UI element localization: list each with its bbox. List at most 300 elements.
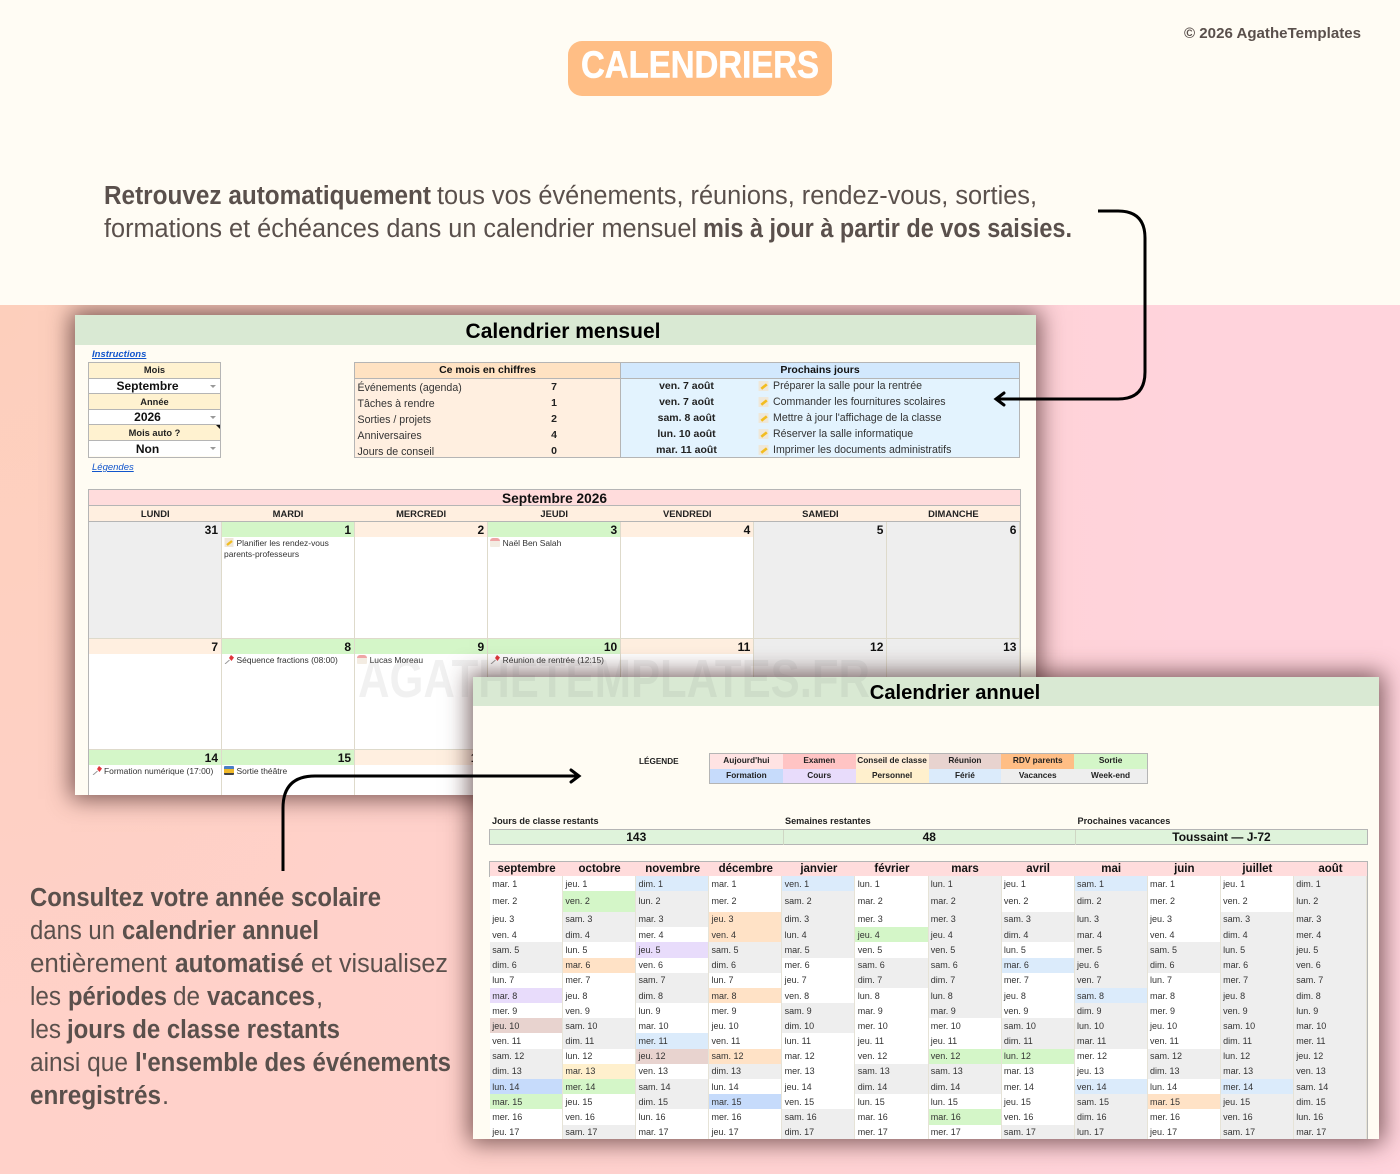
year grid: mer. 2 <box>492 896 517 906</box>
stat values <box>489 829 1368 845</box>
weekday header: DIMANCHE <box>928 508 979 519</box>
year grid: sam. 10 <box>565 1021 597 1031</box>
year grid: sam. 15 <box>1077 1097 1109 1107</box>
year grid: mer. 9 <box>712 1006 737 1016</box>
year grid: mer. 7 <box>1004 975 1029 985</box>
year grid: jeu. 5 <box>1296 945 1318 955</box>
year grid: sam. 3 <box>1004 914 1031 924</box>
year grid: ven. 9 <box>565 1006 590 1016</box>
legend grid: Sortie <box>1099 755 1122 765</box>
stat values: 143 <box>626 830 646 844</box>
text block: annual description: et visualisez <box>311 950 448 978</box>
day cells: 9 <box>477 640 484 654</box>
year grid: lun. 16 <box>1296 1112 1323 1122</box>
month header row: septembre <box>497 863 556 875</box>
year grid: jeu. 8 <box>1004 991 1026 1001</box>
year grid: ven. 6 <box>1296 960 1321 970</box>
stat label: weeks: Semaines restantes <box>785 816 871 826</box>
year grid: ven. 1 <box>785 879 809 889</box>
year grid: lun. 5 <box>565 945 587 955</box>
year grid: mer. 10 <box>858 1021 888 1031</box>
year grid: mar. 9 <box>931 1006 956 1016</box>
year grid: mer. 16 <box>712 1112 742 1122</box>
month header row: février <box>874 863 910 875</box>
weekday header: MERCREDI <box>396 508 446 519</box>
year grid: dim. 10 <box>785 1021 814 1031</box>
year grid: dim. 11 <box>1223 1036 1252 1046</box>
weekday header: MARDI <box>273 508 303 519</box>
year grid: lun. 7 <box>1150 975 1172 985</box>
year grid: ven. 5 <box>858 945 882 955</box>
day cells: Naël Ben Salah <box>503 538 561 548</box>
year grid: mer. 3 <box>858 914 883 924</box>
panel: upcoming days <box>620 362 1020 458</box>
year grid: lun. 12 <box>565 1051 592 1061</box>
year grid: mer. 2 <box>712 896 737 906</box>
year grid: sam. 3 <box>565 914 592 924</box>
year grid: jeu. 8 <box>565 991 587 1001</box>
legend grid: Examen <box>803 755 835 765</box>
year grid: mar. 4 <box>1077 930 1102 940</box>
year grid: mer. 9 <box>1150 1006 1175 1016</box>
year grid: lun. 17 <box>1077 1127 1104 1137</box>
legend grid: Vacances <box>1019 770 1057 780</box>
panel: month figures: 4 <box>551 428 557 440</box>
year grid: sam. 5 <box>1150 945 1177 955</box>
year grid: jeu. 17 <box>712 1127 739 1137</box>
year grid: jeu. 3 <box>492 914 514 924</box>
year grid: sam. 6 <box>858 960 885 970</box>
text block: intro: mis à jour à partir de vos saisies. <box>703 215 1072 243</box>
year grid: dim. 1 <box>1296 879 1321 889</box>
year grid: dim. 6 <box>712 960 736 970</box>
panel: upcoming days: Mettre à jour l'affichage de la classe <box>773 412 941 424</box>
legend grid: Cours <box>807 770 831 780</box>
day cells: 31 <box>205 523 218 537</box>
year grid: mar. 15 <box>1150 1097 1180 1107</box>
annual heading <box>473 677 1379 706</box>
year grid: mar. 17 <box>638 1127 668 1137</box>
text block: annual description: jours de classe restants <box>66 1016 340 1044</box>
year grid: sam. 7 <box>1296 975 1323 985</box>
year grid: dim. 7 <box>931 975 955 985</box>
year grid: ven. 16 <box>1223 1112 1253 1122</box>
panel: month selector: Septembre <box>116 379 179 393</box>
text block: annual description: Consultez votre année scolaire <box>30 884 381 912</box>
day cells: 3 <box>611 523 617 537</box>
year grid: lun. 14 <box>1150 1082 1177 1092</box>
year grid: jeu. 14 <box>785 1082 812 1092</box>
month header row: août <box>1318 863 1343 875</box>
day cells: Séquence fractions (08:00) <box>236 654 338 664</box>
month header row: janvier <box>800 863 837 875</box>
year grid: sam. 5 <box>492 945 519 955</box>
weekday header <box>89 506 1020 522</box>
monthly heading: Calendrier mensuel <box>466 320 660 343</box>
year grid: jeu. 13 <box>1077 1066 1104 1076</box>
panel: month selector: 2026 <box>134 410 161 424</box>
year grid: mar. 5 <box>785 945 810 955</box>
day cells: 4 <box>744 523 750 537</box>
year grid: ven. 14 <box>1077 1082 1106 1092</box>
year grid: dim. 6 <box>1150 960 1175 970</box>
legend grid: Conseil de classe <box>857 755 927 765</box>
year grid: ven. 4 <box>1150 930 1175 940</box>
text block: intro: formations et échéances dans un calendrier mensuel <box>104 215 697 243</box>
year grid: lun. 8 <box>931 991 953 1001</box>
year grid: mar. 17 <box>1296 1127 1326 1137</box>
day cells: Lucas Moreau <box>370 654 423 664</box>
text block: annual description: automatisé <box>175 950 304 978</box>
year grid: lun. 9 <box>1296 1006 1318 1016</box>
year grid: sam. 3 <box>1223 914 1250 924</box>
year grid: ven. 4 <box>492 930 517 940</box>
day cells: 13 <box>1003 640 1016 654</box>
year grid: mar. 1 <box>712 879 737 889</box>
year grid: ven. 12 <box>858 1051 887 1061</box>
panel: month figures: 0 <box>551 444 557 456</box>
year grid <box>490 876 1368 1140</box>
panel: month figures: Ce mois en chiffres <box>439 364 536 376</box>
year grid: ven. 11 <box>492 1036 521 1046</box>
legend grid: Réunion <box>948 755 982 765</box>
day cells: Réunion de rentrée (12:15) <box>503 654 604 664</box>
year grid: mar. 8 <box>712 991 737 1001</box>
year grid: mer. 7 <box>565 975 590 985</box>
year grid: ven. 16 <box>565 1112 595 1122</box>
year grid: mar. 15 <box>492 1097 522 1107</box>
year grid: mar. 13 <box>1004 1066 1034 1076</box>
legend grid: Aujourd'hui <box>723 755 770 765</box>
day cells: Formation numérique (17:00) <box>104 766 213 776</box>
year grid: ven. 2 <box>565 896 590 906</box>
year grid: sam. 2 <box>785 896 812 906</box>
year grid: ven. 7 <box>1077 975 1101 985</box>
year grid: mar. 16 <box>858 1112 888 1122</box>
year grid: jeu. 12 <box>638 1051 665 1061</box>
year grid: mer. 17 <box>858 1127 888 1137</box>
year grid: mar. 10 <box>638 1021 668 1031</box>
copyright: © 2026 AgatheTemplates <box>1184 25 1361 42</box>
link: legends: Légendes <box>92 462 134 473</box>
year grid: lun. 4 <box>785 930 807 940</box>
year grid: ven. 6 <box>638 960 663 970</box>
year grid: lun. 5 <box>1004 945 1026 955</box>
text block: annual description: les <box>30 1016 61 1044</box>
year grid: ven. 16 <box>1004 1112 1033 1122</box>
year grid: dim. 11 <box>565 1036 594 1046</box>
panel: month figures: Événements (agenda) <box>358 382 462 394</box>
link: instructions: Instructions <box>92 349 146 360</box>
year grid: mar. 15 <box>712 1097 742 1107</box>
year grid: mar. 1 <box>1150 879 1175 889</box>
month header row: juillet <box>1242 863 1272 875</box>
panel: month figures: Tâches à rendre <box>358 398 435 410</box>
stat values: 48 <box>923 830 936 844</box>
year grid: sam. 9 <box>785 1006 812 1016</box>
year grid: dim. 9 <box>1077 1006 1101 1016</box>
year grid: jeu. 1 <box>565 879 587 889</box>
year grid: ven. 2 <box>1223 896 1248 906</box>
year grid: mar. 9 <box>858 1006 883 1016</box>
year grid: sam. 12 <box>712 1051 744 1061</box>
year grid: mer. 12 <box>1077 1051 1107 1061</box>
legend label: LÉGENDE <box>639 757 679 766</box>
year grid: jeu. 15 <box>565 1097 592 1107</box>
year grid: sam. 17 <box>1223 1127 1255 1137</box>
year grid: dim. 15 <box>1296 1097 1326 1107</box>
year grid: dim. 15 <box>638 1097 668 1107</box>
year grid: sam. 13 <box>931 1066 963 1076</box>
panel: upcoming days: ven. 7 août <box>659 380 714 392</box>
year grid: ven. 4 <box>712 930 736 940</box>
legend grid: Personnel <box>872 770 912 780</box>
month header row: octobre <box>579 863 621 875</box>
day cells <box>89 522 1020 795</box>
year grid: ven. 13 <box>1296 1066 1326 1076</box>
year grid: mer. 2 <box>1150 896 1175 906</box>
year grid: mar. 2 <box>858 896 883 906</box>
panel: month grid <box>88 489 1021 795</box>
stat values: Toussaint — J-72 <box>1172 830 1271 844</box>
title badge: CALENDRIERS <box>581 44 819 86</box>
legend grid: Férié <box>955 770 975 780</box>
legend grid: Formation <box>726 770 767 780</box>
year grid: lun. 11 <box>785 1036 811 1046</box>
stat label: holidays: Prochaines vacances <box>1078 816 1170 826</box>
text block: annual description: ainsi que <box>30 1049 128 1077</box>
year grid: sam. 8 <box>1077 991 1104 1001</box>
year grid: jeu. 5 <box>638 945 660 955</box>
month header row: novembre <box>645 863 700 875</box>
year grid: jeu. 11 <box>931 1036 957 1046</box>
year grid: mar. 3 <box>638 914 663 924</box>
day cells: 5 <box>877 523 883 537</box>
annual heading: Calendrier annuel <box>870 682 1040 704</box>
panel: month selector: Non <box>136 442 159 456</box>
year grid: mer. 4 <box>638 930 663 940</box>
text block: annual description: l'ensemble des événements <box>135 1049 451 1077</box>
year grid: mer. 16 <box>1150 1112 1180 1122</box>
year grid: lun. 2 <box>1296 896 1318 906</box>
year grid: sam. 7 <box>638 975 665 985</box>
year grid: ven. 9 <box>1223 1006 1248 1016</box>
year grid: mer. 16 <box>492 1112 522 1122</box>
year grid: dim. 13 <box>492 1066 522 1076</box>
year grid: dim. 16 <box>1077 1112 1106 1122</box>
text block: annual description: dans un <box>30 917 115 945</box>
year grid: jeu. 4 <box>858 930 880 940</box>
year grid: jeu. 8 <box>1223 991 1245 1001</box>
panel: month figures: 7 <box>551 380 557 392</box>
panel: annual calendar sheet <box>473 677 1379 1139</box>
panel: upcoming days: ven. 7 août <box>659 396 714 408</box>
year grid: sam. 6 <box>931 960 958 970</box>
year grid: lun. 14 <box>492 1082 519 1092</box>
year grid: mar. 16 <box>931 1112 961 1122</box>
year grid: lun. 7 <box>712 975 734 985</box>
year grid: lun. 1 <box>931 879 953 889</box>
year grid: mar. 12 <box>785 1051 815 1061</box>
year grid: sam. 17 <box>1004 1127 1036 1137</box>
year grid: sam. 17 <box>565 1127 597 1137</box>
weekday header: JEUDI <box>540 508 568 519</box>
year grid: dim. 14 <box>931 1082 960 1092</box>
weekday header: LUNDI <box>141 508 170 519</box>
month header row: avril <box>1026 863 1050 875</box>
year grid: dim. 17 <box>785 1127 814 1137</box>
year grid: dim. 14 <box>858 1082 887 1092</box>
legend grid: Week-end <box>1091 770 1130 780</box>
panel: month figures: Anniversaires <box>358 430 422 442</box>
year grid: mer. 17 <box>931 1127 961 1137</box>
panel: month figures <box>354 362 621 458</box>
panel: upcoming days: Imprimer les documents administratifs <box>773 444 951 456</box>
panel: upcoming days: mar. 11 août <box>656 444 717 456</box>
year grid: ven. 13 <box>638 1066 668 1076</box>
panel: upcoming days: Réserver la salle informatique <box>773 428 913 440</box>
text block: annual description: . <box>162 1082 169 1110</box>
day cells: 15 <box>338 751 351 765</box>
weekday header: VENDREDI <box>663 508 712 519</box>
year grid: mer. 14 <box>565 1082 595 1092</box>
year grid: jeu. 11 <box>858 1036 884 1046</box>
year grid: sam. 10 <box>1223 1021 1255 1031</box>
year grid: dim. 2 <box>1077 896 1101 906</box>
panel: upcoming days: Prochains jours <box>780 364 860 376</box>
panel: month figures: Sorties / projets <box>358 414 431 426</box>
year grid: dim. 8 <box>1296 991 1321 1001</box>
day cells: 12 <box>870 640 883 654</box>
year grid: dim. 6 <box>492 960 517 970</box>
year grid: dim. 4 <box>565 930 590 940</box>
year grid: dim. 13 <box>1150 1066 1180 1076</box>
year grid: mar. 1 <box>492 879 517 889</box>
year grid: sam. 13 <box>858 1066 890 1076</box>
year grid: lun. 12 <box>1223 1051 1250 1061</box>
day cells: 14 <box>205 751 218 765</box>
year grid: mer. 13 <box>785 1066 815 1076</box>
year grid: mar. 3 <box>1296 914 1321 924</box>
panel: month selector <box>88 362 221 458</box>
year grid: lun. 1 <box>858 879 880 889</box>
year grid: ven. 9 <box>1004 1006 1028 1016</box>
year grid: mer. 11 <box>1296 1036 1326 1046</box>
year grid: mer. 7 <box>1223 975 1248 985</box>
year grid: jeu. 7 <box>785 975 807 985</box>
day cells: 7 <box>211 640 218 654</box>
text block: annual description: vacances <box>207 983 315 1011</box>
year grid: mer. 9 <box>492 1006 517 1016</box>
year grid: sam. 14 <box>1296 1082 1328 1092</box>
day cells: 11 <box>738 640 750 654</box>
year grid: lun. 15 <box>931 1097 958 1107</box>
panel: upcoming days: lun. 10 août <box>657 428 716 440</box>
day cells: 16 <box>471 751 484 765</box>
month header row: mai <box>1101 863 1121 875</box>
month grid title: Septembre 2026 <box>502 491 607 506</box>
text block: annual description: , <box>316 983 323 1011</box>
year grid: lun. 5 <box>1223 945 1245 955</box>
year grid: mer. 5 <box>1077 945 1102 955</box>
year grid: lun. 8 <box>858 991 880 1001</box>
day cells: 2 <box>477 523 484 537</box>
monthly heading <box>75 315 1036 345</box>
text block: annual description: enregistrés <box>30 1082 161 1110</box>
panel: month selector: Mois <box>144 365 165 375</box>
day cells: 10 <box>604 640 617 654</box>
year grid: mar. 8 <box>1150 991 1175 1001</box>
year grid: mer. 6 <box>785 960 810 970</box>
year grid: mer. 14 <box>1004 1082 1034 1092</box>
year grid: sam. 12 <box>492 1051 524 1061</box>
year grid: jeu. 1 <box>1223 879 1245 889</box>
stat label: school days: Jours de classe restants <box>492 816 599 826</box>
panel: upcoming days: sam. 8 août <box>658 412 715 424</box>
panel: upcoming days: Préparer la salle pour la rentrée <box>773 380 922 392</box>
year grid: sam. 5 <box>712 945 739 955</box>
year grid: mer. 14 <box>1223 1082 1253 1092</box>
panel: month selector: Année <box>140 397 169 407</box>
year grid: jeu. 10 <box>492 1021 519 1031</box>
legend grid <box>709 753 1148 784</box>
day cells: 1 <box>344 523 351 537</box>
year grid: jeu. 15 <box>1223 1097 1250 1107</box>
year grid: lun. 12 <box>1004 1051 1031 1061</box>
year grid: mer. 4 <box>1296 930 1321 940</box>
year grid: mar. 6 <box>1223 960 1248 970</box>
legend grid: RDV parents <box>1013 755 1063 765</box>
panel: month figures: 2 <box>551 412 557 424</box>
year grid: ven. 11 <box>712 1036 740 1046</box>
year grid: sam. 14 <box>638 1082 670 1092</box>
text block: annual description: entièrement <box>30 950 167 978</box>
year grid: lun. 16 <box>638 1112 665 1122</box>
month header row: mars <box>951 863 979 875</box>
year grid: dim. 3 <box>785 914 809 924</box>
day cells: Sortie théâtre <box>236 766 287 776</box>
year grid: sam. 16 <box>785 1112 817 1122</box>
year grid: mar. 6 <box>565 960 590 970</box>
year grid: jeu. 1 <box>1004 879 1026 889</box>
year grid: dim. 11 <box>1004 1036 1033 1046</box>
year grid: jeu. 3 <box>1150 914 1172 924</box>
panel: monthly calendar sheet <box>75 315 1036 795</box>
year grid: lun. 15 <box>858 1097 885 1107</box>
year grid: mar. 6 <box>1004 960 1029 970</box>
year grid: lun. 14 <box>712 1082 739 1092</box>
year grid: ven. 5 <box>931 945 955 955</box>
year grid: lun. 10 <box>1077 1021 1104 1031</box>
year grid: dim. 4 <box>1223 930 1248 940</box>
year grid: jeu. 10 <box>1150 1021 1177 1031</box>
year grid: mar. 8 <box>492 991 517 1001</box>
year grid: sam. 10 <box>1004 1021 1036 1031</box>
year grid: ven. 12 <box>931 1051 960 1061</box>
year grid: jeu. 12 <box>1296 1051 1323 1061</box>
year grid: dim. 4 <box>1004 930 1028 940</box>
panel: upcoming days: Commander les fournitures scolaires <box>773 396 946 408</box>
year grid: dim. 7 <box>858 975 882 985</box>
background band <box>0 305 1400 1174</box>
year grid: ven. 15 <box>785 1097 814 1107</box>
year grid: jeu. 17 <box>492 1127 519 1137</box>
day cells: parents-professeurs <box>224 548 299 558</box>
year grid: jeu. 17 <box>1150 1127 1177 1137</box>
year grid: jeu. 6 <box>1077 960 1099 970</box>
year grid: ven. 8 <box>785 991 809 1001</box>
year grid: jeu. 15 <box>1004 1097 1031 1107</box>
